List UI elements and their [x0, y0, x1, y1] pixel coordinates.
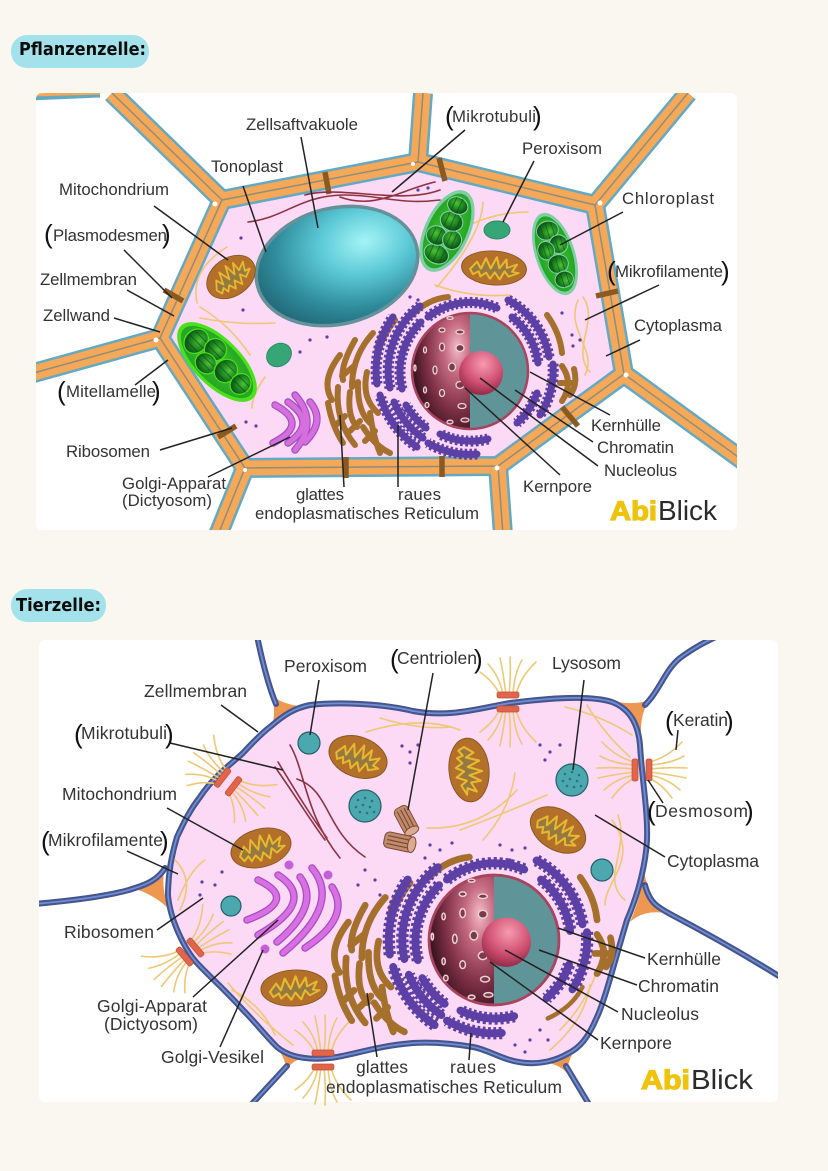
animal labels: Golgi-Vesikel [161, 1047, 264, 1067]
logo: AbiBlick: Abi [641, 1065, 690, 1095]
plant labels: Golgi-Apparat [122, 474, 226, 493]
membrane [34, 634, 782, 1106]
animal labels: Peroxisom [284, 656, 367, 676]
animal labels: Desmosom [655, 801, 748, 821]
nucleus with endoplasmic reticulum [334, 857, 612, 1033]
plant labels: ( [607, 256, 616, 286]
animal labels: ( [665, 706, 674, 736]
plant labels: ) [721, 256, 730, 286]
logo: AbiBlick: Abi [610, 496, 657, 526]
animal labels: Mikrofilamente [48, 830, 163, 850]
animal labels: ) [160, 826, 169, 856]
animal labels: Ribosomen [64, 922, 154, 942]
vacuole [243, 190, 431, 342]
animal labels: ( [390, 644, 399, 674]
plant labels: Mikrofilamente [615, 262, 723, 281]
animal labels: ) [474, 644, 483, 674]
plant labels: endoplasmatisches Reticulum [255, 504, 479, 523]
plant labels: raues [398, 485, 441, 504]
logo: AbiBlick [610, 495, 718, 526]
animal labels: Zellmembran [144, 681, 247, 701]
peroxisomes [221, 732, 613, 916]
plant labels: ) [152, 376, 161, 406]
plant labels: (Dictyosom) [122, 491, 212, 510]
plant labels: Zellsaftvakuole [246, 115, 358, 134]
animal labels: endoplasmatisches Reticulum [326, 1077, 562, 1097]
golgi apparatus [273, 395, 317, 450]
animal labels: Golgi-Apparat [97, 996, 207, 1016]
peroxisomes [262, 221, 510, 371]
animal labels: ( [74, 719, 83, 749]
plant labels: Zellwand [43, 306, 110, 325]
heading: Pflanzenzelle [11, 35, 149, 68]
logo: AbiBlick: Blick [658, 495, 718, 526]
filaments [175, 705, 632, 1050]
plant labels: Chloroplast [622, 189, 714, 208]
logo: AbiBlick: Blick [691, 1064, 754, 1095]
animal labels: Kernhülle [647, 949, 721, 969]
animal labels: raues [450, 1057, 496, 1077]
cell walls [30, 93, 745, 535]
animal labels: Centriolen [397, 648, 477, 668]
plant labels: glattes [296, 485, 344, 504]
animal labels: ) [745, 796, 754, 826]
plant labels: Kernpore [523, 477, 592, 496]
plant labels: Plasmodesmen [53, 226, 167, 245]
heading: Tierzelle: Tierzelle: [16, 595, 101, 616]
plant labels: Peroxisom [522, 139, 602, 158]
logo: AbiBlick [641, 1064, 754, 1095]
animal labels: Mikrotubuli [81, 723, 167, 743]
leader lines [114, 130, 659, 487]
plant labels: Tonoplast [211, 157, 283, 176]
ribosomes [198, 743, 562, 1054]
nucleus with endoplasmic reticulum [328, 297, 575, 454]
ribosomes [239, 186, 582, 428]
plant labels: Mitellamelle [66, 382, 156, 401]
plant labels: Nucleolus [604, 461, 677, 480]
plant labels: Mitochondrium [59, 180, 169, 199]
plant labels: Chromatin [597, 438, 674, 457]
animal labels: glattes [356, 1057, 408, 1077]
animal labels: Cytoplasma [667, 851, 759, 871]
animal labels: ( [647, 796, 656, 826]
animal labels [41, 644, 759, 1097]
plant labels [40, 101, 730, 523]
animal labels: Chromatin [638, 976, 719, 996]
mitochondria [198, 246, 528, 308]
animal labels: Lysosom [552, 653, 621, 673]
animal labels: ) [165, 719, 174, 749]
mitochondria [227, 728, 594, 1008]
microtubules [248, 182, 440, 222]
plant labels: ( [44, 219, 53, 249]
panel: animal cell [34, 634, 782, 1106]
desmosomes [138, 657, 687, 1105]
centrioles [383, 804, 420, 853]
animal labels: Kernpore [600, 1033, 672, 1053]
plant labels: ( [57, 376, 66, 406]
animal labels: ) [725, 706, 734, 736]
plant labels: ) [533, 101, 542, 131]
plant labels: Cytoplasma [634, 316, 723, 335]
lysosomes [349, 764, 588, 822]
plant labels: Zellmembran [40, 270, 137, 289]
plant labels: ( [445, 101, 454, 131]
plant labels: Ribosomen [66, 442, 150, 461]
microtubules [275, 745, 365, 858]
filaments [196, 202, 590, 408]
animal labels: (Dictyosom) [104, 1014, 198, 1034]
plant labels: Kernhülle [591, 416, 661, 435]
golgi apparatus [247, 860, 338, 954]
heading: Tierzelle [11, 589, 106, 622]
chloroplasts [167, 184, 585, 412]
animal labels: Mitochondrium [62, 784, 177, 804]
plant labels: ) [162, 219, 171, 249]
heading: Pflanzenzelle: Pflanzenzelle: [19, 39, 146, 60]
animal labels: ( [41, 826, 50, 856]
leader lines [127, 673, 678, 1060]
animal labels: Nucleolus [621, 1004, 699, 1024]
panel: plant cell [30, 93, 745, 535]
plant labels: Mikrotubuli [452, 107, 536, 126]
animal labels: Keratin [673, 710, 728, 730]
